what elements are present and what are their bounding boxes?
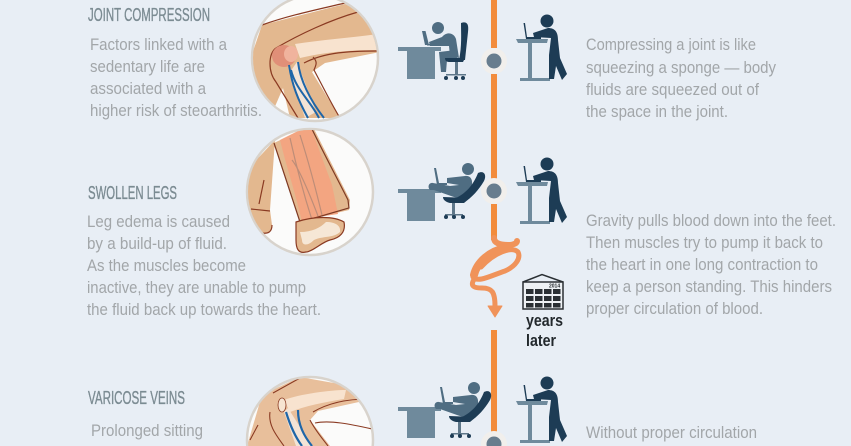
section 2 right text: proper circulation of blood. <box>586 299 763 318</box>
section 2 right text <box>586 211 836 318</box>
section 1 left text: associated with a <box>90 79 206 98</box>
section 1 left text: Factors linked with a <box>90 35 227 54</box>
section 3 right text: Without proper circulation <box>586 423 757 442</box>
timeline marker 3 <box>481 431 507 446</box>
squiggle arrow: time passing <box>472 238 519 317</box>
section 3 heading: VARICOSE VEINS <box>88 388 185 408</box>
section 2 left text: Leg edema is caused <box>87 212 230 231</box>
section 2 left text: inactive, they are unable to pump <box>87 278 306 297</box>
timeline marker 1 <box>481 48 507 74</box>
section 3 left text: Prolonged sitting <box>91 421 203 440</box>
illustration: knee joint compression <box>250 0 380 121</box>
section 1 left text: higher risk of steoarthritis. <box>90 101 262 120</box>
label: years later: years <box>526 311 563 330</box>
section 2 left text: by a build-up of fluid. <box>87 234 227 253</box>
figure: reclined at desk, feet up <box>398 163 485 221</box>
section 1 right text: the space in the joint. <box>586 102 728 121</box>
figure: standing at desk 2 <box>516 158 567 224</box>
section 1 right text <box>586 35 776 121</box>
section 2 left text: the fluid back up towards the heart. <box>87 300 321 319</box>
section 1 right text: squeezing a sponge — body <box>586 58 776 77</box>
timeline: vertical orange line <box>491 0 497 432</box>
section 1 heading: JOINT COMPRESSION <box>88 5 210 25</box>
section 2 left text: As the muscles become <box>87 256 246 275</box>
section 2 right text: Then muscles try to pump it back to <box>586 233 823 252</box>
label: years later: later <box>526 331 556 350</box>
figure: standing at desk 3 <box>516 376 567 443</box>
illustration: swollen legs <box>247 125 373 255</box>
timeline marker 2 <box>481 178 507 204</box>
illustration: varicose veins <box>247 377 373 446</box>
figure: standing at desk 1 <box>516 14 567 81</box>
section 2 right text: the heart in one long contraction to <box>586 255 818 274</box>
figure: reclined at desk 2 <box>398 382 491 438</box>
section 1 right text: Compressing a joint is like <box>586 35 756 54</box>
calendar icon <box>523 274 563 309</box>
section 1 left text: sedentary life are <box>90 57 205 76</box>
section 1 right text: fluids are squeezed out of <box>586 80 759 99</box>
section 2 heading: SWOLLEN LEGS <box>88 183 177 203</box>
label: years later <box>526 311 563 350</box>
section 2 left text <box>87 212 321 319</box>
section 1 left text <box>90 35 262 120</box>
figure: seated at desk, hunched <box>398 22 468 80</box>
calendar icon: 2014 <box>549 284 560 290</box>
